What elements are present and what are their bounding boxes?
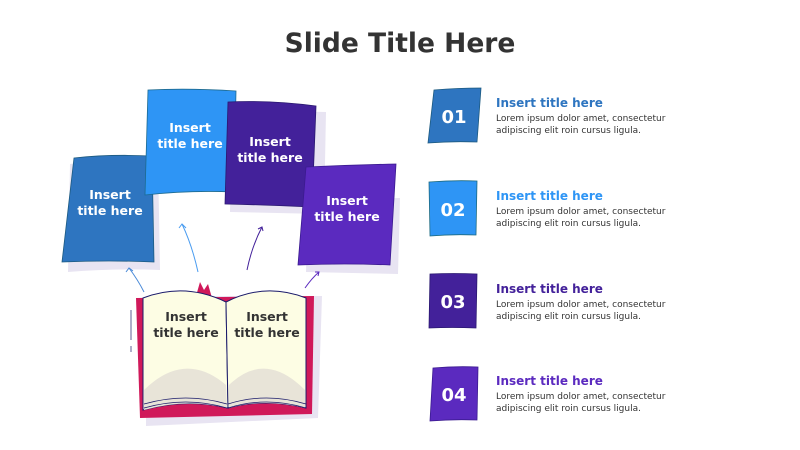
item 03: adipiscing elit roin cursus ligula. <box>496 312 641 322</box>
open book <box>131 282 322 426</box>
item 04 <box>430 367 666 421</box>
card 3: title here <box>237 150 303 165</box>
item 02: Lorem ipsum dolor amet, consectetur <box>496 207 666 217</box>
open book: title here <box>153 325 219 340</box>
item 03: 03 <box>440 292 466 313</box>
card 1: Insert <box>89 187 131 202</box>
item 03 <box>429 274 666 328</box>
item 04: 04 <box>441 385 467 406</box>
card 2: Insert <box>169 120 211 135</box>
item 01: adipiscing elit roin cursus ligula. <box>496 126 641 136</box>
item 04: Lorem ipsum dolor amet, consectetur <box>496 392 666 402</box>
item 02: adipiscing elit roin cursus ligula. <box>496 219 641 229</box>
item 01: Insert title here <box>496 96 603 110</box>
title: Slide Title Here <box>285 28 515 59</box>
card 4 <box>298 164 400 274</box>
card 1 <box>62 155 160 272</box>
item 04: adipiscing elit roin cursus ligula. <box>496 404 641 414</box>
item 01 <box>428 88 666 143</box>
item 03: Lorem ipsum dolor amet, consectetur <box>496 300 666 310</box>
item 01: Lorem ipsum dolor amet, consectetur <box>496 114 666 124</box>
card 4: title here <box>314 209 380 224</box>
arrows <box>126 224 319 292</box>
open book: Insert <box>246 309 288 324</box>
open book: Insert <box>165 309 207 324</box>
item 02 <box>429 181 666 236</box>
item 04: Insert title here <box>496 374 603 388</box>
card 3 <box>225 102 326 214</box>
open book: title here <box>234 325 300 340</box>
card 1: title here <box>77 203 143 218</box>
card 3: Insert <box>249 134 291 149</box>
item 02: Insert title here <box>496 189 603 203</box>
item 01: 01 <box>441 107 467 128</box>
card 2 <box>145 89 236 195</box>
card 2: title here <box>157 136 223 151</box>
card 4: Insert <box>326 193 368 208</box>
item 02: 02 <box>440 200 466 221</box>
item 03: Insert title here <box>496 282 603 296</box>
